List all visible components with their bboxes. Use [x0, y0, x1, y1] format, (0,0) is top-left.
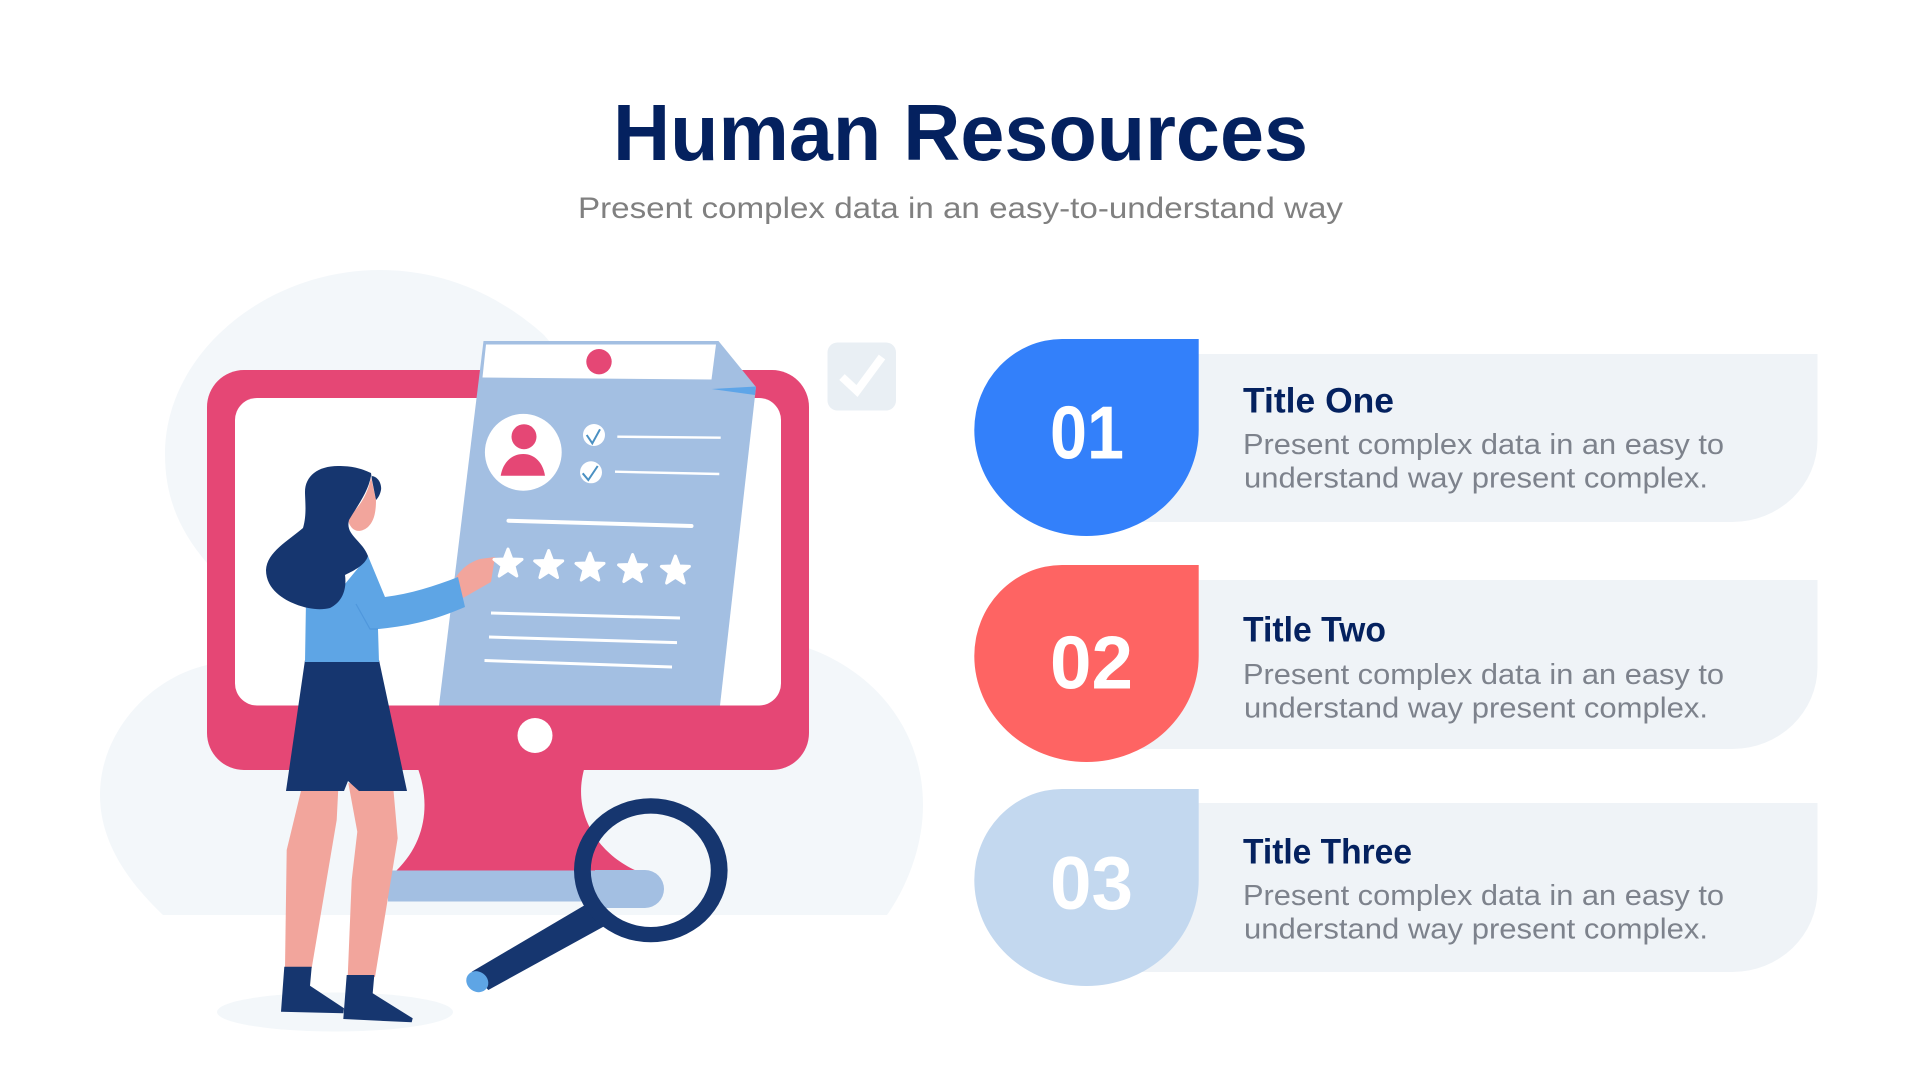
heading line: [508, 521, 692, 526]
panel: item 01: [974, 339, 1818, 536]
description: understand way present complex.: [1244, 462, 1708, 494]
panel: item 03: [974, 789, 1818, 986]
background cloud: [100, 270, 923, 915]
description: [1243, 659, 1724, 724]
illustration: woman reviewing a profile on a monitor: [100, 270, 923, 1032]
ground shadow: [217, 992, 453, 1032]
description: Present complex data in an easy to: [1243, 659, 1724, 691]
title: Human Resources: [613, 88, 1308, 177]
number: 01: [1050, 390, 1124, 474]
card background: [1086, 803, 1818, 972]
face: [348, 477, 376, 531]
blouse: [305, 556, 465, 662]
heading: Title Three: [1243, 832, 1412, 872]
magnifying glass: [462, 798, 728, 996]
description: [1243, 429, 1724, 494]
text lines: [484, 613, 680, 667]
checklist: [580, 424, 721, 483]
panel: item 02: [974, 565, 1818, 762]
card background: [1086, 354, 1818, 522]
profile document: [439, 341, 756, 706]
avatar: [485, 414, 562, 491]
description: Present complex data in an easy to: [1243, 429, 1724, 461]
description: understand way present complex.: [1244, 914, 1708, 946]
skirt: [286, 660, 407, 791]
heading: Title Two: [1243, 610, 1386, 650]
legs: [285, 783, 398, 977]
description: understand way present complex.: [1244, 692, 1708, 724]
pale blue drop badge: [974, 789, 1199, 986]
check badge: [828, 342, 896, 410]
monitor stand: [396, 766, 637, 871]
number: 02: [1050, 620, 1133, 704]
hand: [456, 557, 495, 598]
description: Present complex data in an easy to: [1243, 880, 1724, 912]
monitor base: [388, 870, 664, 908]
blue drop badge: [974, 339, 1199, 536]
heading: Title One: [1243, 382, 1394, 421]
card background: [1086, 580, 1818, 749]
red drop badge: [974, 565, 1199, 762]
five star rating: [494, 549, 689, 583]
number: 03: [1050, 841, 1133, 925]
shoes: [281, 967, 413, 1022]
woman: [266, 466, 495, 1022]
subtitle: Present complex data in an easy-to-understand way: [578, 192, 1343, 225]
monitor: [207, 370, 809, 770]
hair: [266, 466, 381, 609]
description: [1243, 880, 1724, 946]
